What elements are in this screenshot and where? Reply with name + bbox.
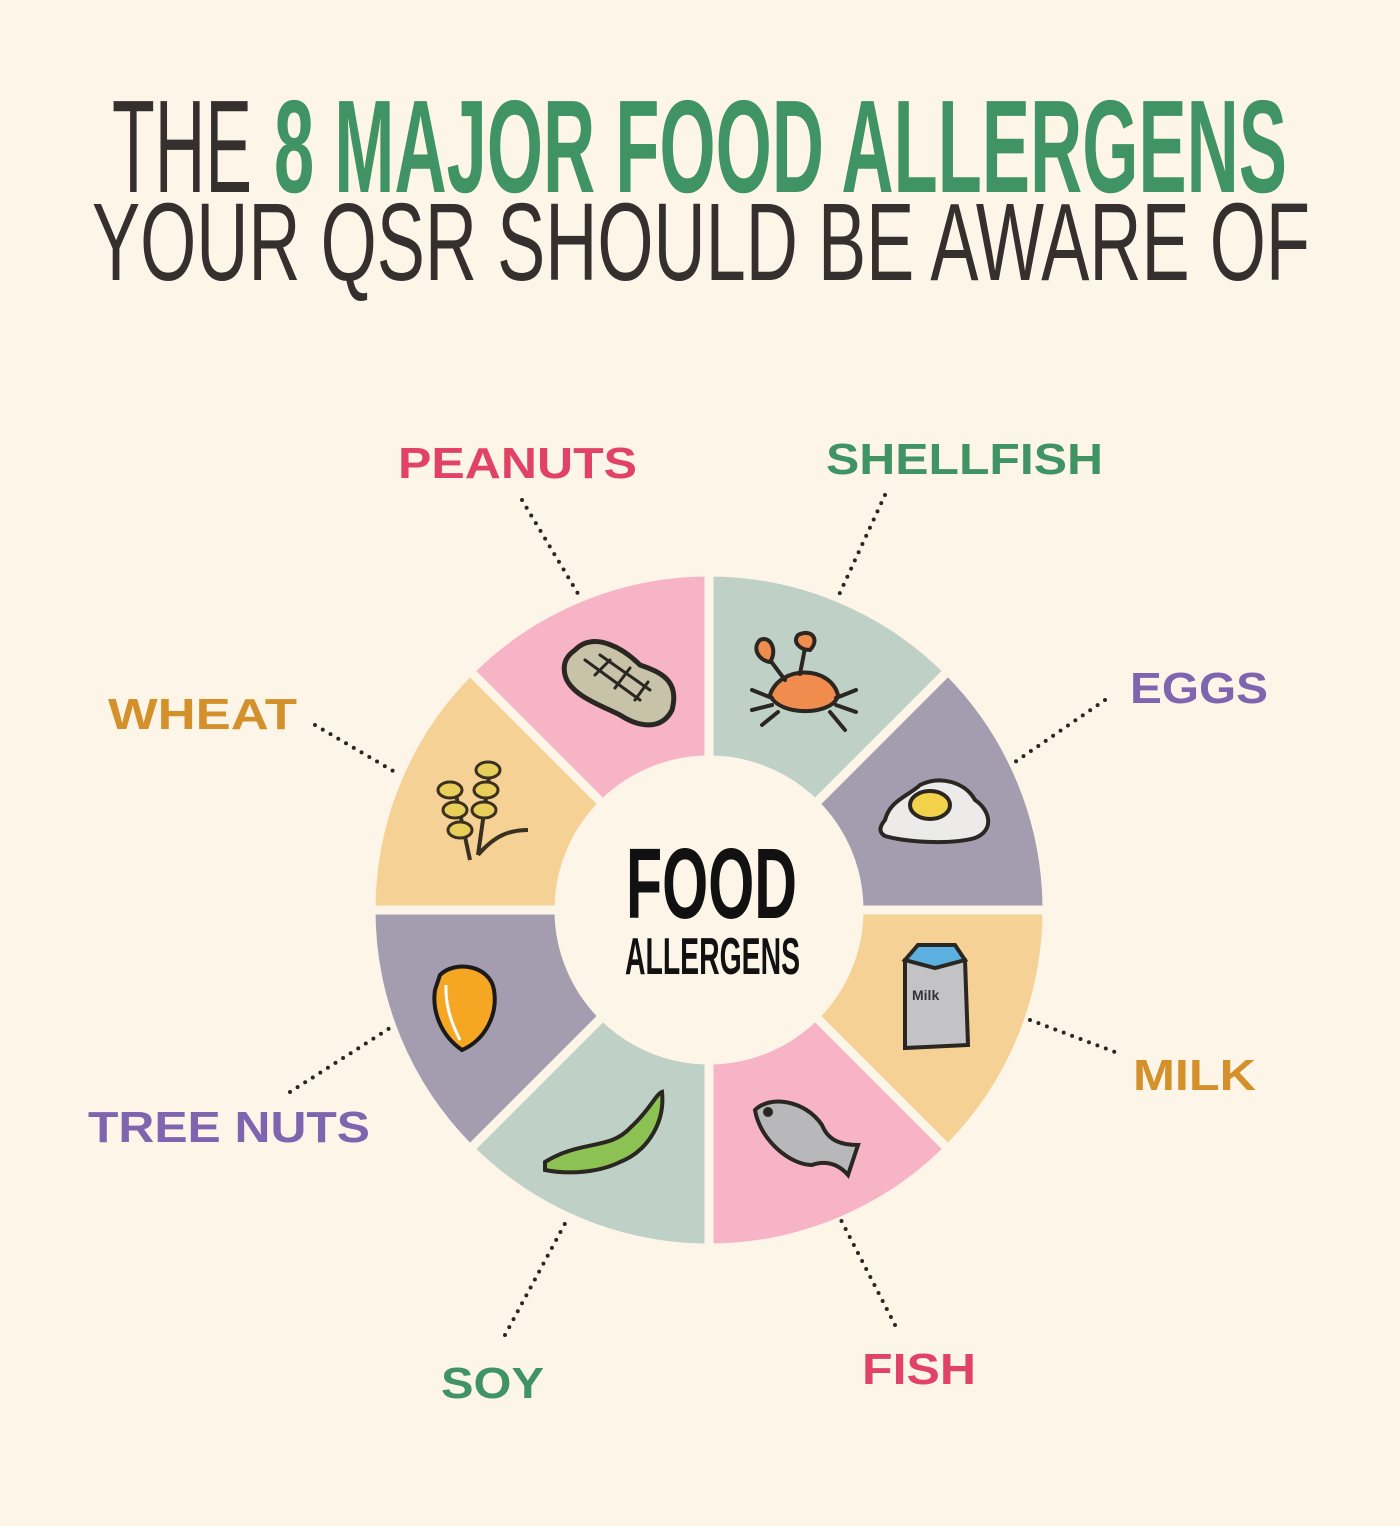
title [92, 73, 1310, 304]
segment: fish [709, 1016, 948, 1248]
center text: FOOD [626, 828, 797, 940]
labels: SOY [441, 1359, 544, 1408]
title: THE [112, 73, 252, 220]
icon: hazelnut [434, 967, 495, 1050]
segment: eggs [815, 671, 1047, 910]
icon: soy pod [545, 1092, 662, 1172]
center text [625, 828, 800, 986]
labels: SHELLFISH [826, 435, 1103, 484]
labels: WHEAT [108, 690, 297, 739]
icon: milk carton [905, 945, 968, 1048]
segment: soy [470, 1016, 709, 1248]
labels: PEANUTS [398, 439, 637, 488]
labels: FISH [862, 1345, 976, 1394]
segment: peanuts [470, 572, 709, 804]
icon: milk carton: Milk [912, 987, 939, 1003]
labels: TREE NUTS [88, 1103, 370, 1152]
segment: tree nuts [371, 910, 603, 1149]
segment: wheat [371, 671, 603, 910]
icon: crab [752, 633, 856, 730]
wheel [371, 572, 1047, 1248]
center text: ALLERGENS [625, 928, 800, 986]
labels: MILK [1133, 1051, 1256, 1100]
dotted leader lines [290, 495, 1115, 1335]
labels: EGGS [1130, 664, 1268, 713]
segment: milk [815, 910, 1047, 1149]
segment: shellfish [709, 572, 948, 804]
icon: peanut [564, 642, 674, 725]
icon: egg [880, 780, 988, 842]
labels [88, 435, 1268, 1408]
icon: wheat [438, 762, 528, 860]
icon: fish [755, 1102, 858, 1175]
